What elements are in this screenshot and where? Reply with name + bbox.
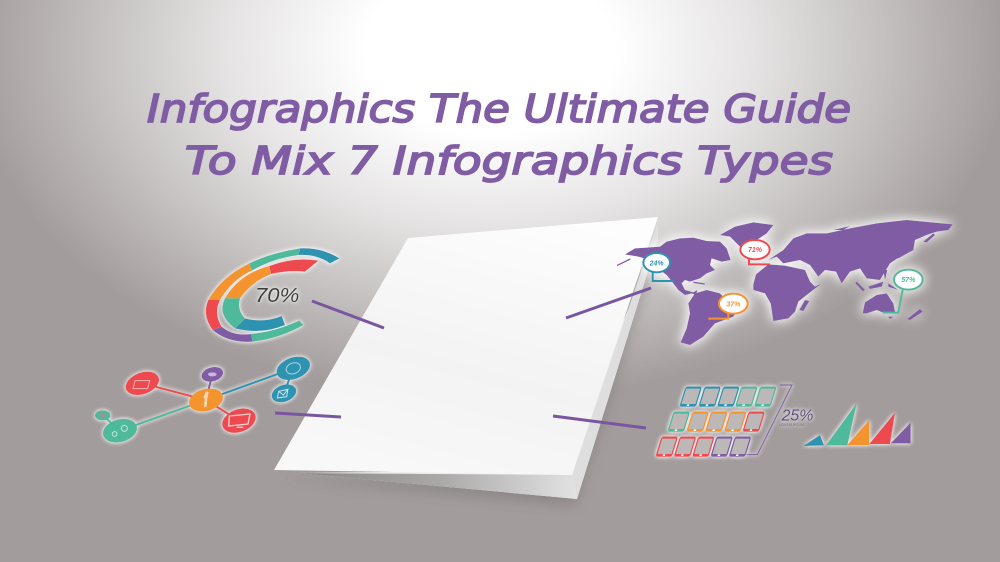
phones row 1 xyxy=(680,387,776,407)
outer ring xyxy=(206,248,339,342)
phones row 2 xyxy=(668,412,764,432)
folder brochure xyxy=(274,217,660,505)
Old World xyxy=(753,220,953,321)
pin 57% xyxy=(883,270,923,313)
inner shadow of fold xyxy=(297,473,577,499)
user node xyxy=(200,365,225,384)
Madagascar xyxy=(799,300,809,311)
gear node xyxy=(100,415,140,446)
title: To Mix 7 Infographics Types xyxy=(185,139,833,183)
clock node xyxy=(273,352,313,384)
Japan xyxy=(896,247,913,258)
monitor node xyxy=(219,404,259,437)
bracket xyxy=(747,385,792,455)
Arctic islands xyxy=(833,226,850,230)
pin 37%: 37% xyxy=(726,301,741,308)
Americas xyxy=(617,222,773,345)
Africa xyxy=(753,264,822,321)
small node xyxy=(95,410,110,420)
pin 37% xyxy=(708,294,748,319)
pin 71% xyxy=(740,240,770,264)
title xyxy=(147,87,851,183)
Indonesia xyxy=(855,270,898,291)
Aleutians xyxy=(617,258,631,266)
percent label: 25% xyxy=(781,407,813,424)
folder node xyxy=(122,367,162,399)
donut chart xyxy=(206,248,339,342)
triangle chart xyxy=(803,403,911,446)
back page xyxy=(297,239,658,499)
Eurasia xyxy=(768,220,953,283)
front page xyxy=(274,217,658,475)
caption: LOREM IPSUM xyxy=(779,422,805,427)
South America xyxy=(681,290,742,345)
Tasmania xyxy=(888,317,893,319)
Greenland xyxy=(720,222,773,248)
phone grid xyxy=(656,385,813,457)
phones row 3 xyxy=(656,437,751,457)
percent label: 70% xyxy=(255,284,299,307)
title: Infographics The Ultimate Guide xyxy=(147,87,851,131)
world map xyxy=(617,220,953,345)
network diagram xyxy=(95,352,313,446)
inner ring xyxy=(222,259,318,331)
mail node xyxy=(269,381,299,405)
Caribbean xyxy=(693,282,705,285)
connectors xyxy=(103,368,293,431)
Sakhalin xyxy=(923,233,935,242)
pin 24% xyxy=(643,253,674,281)
person node xyxy=(186,385,226,415)
pin 57%: 57% xyxy=(901,277,916,284)
connector lines xyxy=(275,288,651,428)
map pins xyxy=(643,240,923,319)
Australia xyxy=(863,293,895,313)
pin 24%: 24% xyxy=(649,260,664,267)
New Zealand xyxy=(907,309,923,320)
pin 71%: 71% xyxy=(748,247,763,254)
North America xyxy=(625,238,731,295)
